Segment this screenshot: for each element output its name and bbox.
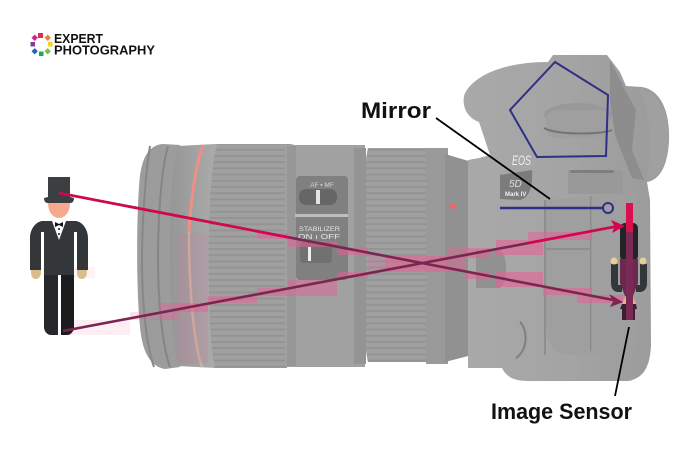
image sensor pointer line	[615, 327, 629, 396]
inverted hands	[610, 258, 618, 264]
lens barrel section	[170, 144, 300, 368]
shirt and bow tie	[52, 221, 66, 240]
right rib section	[362, 148, 434, 362]
camera body	[464, 55, 669, 381]
legs	[44, 275, 58, 335]
red ring	[189, 145, 203, 232]
inverted legs	[620, 223, 638, 261]
label: Image Sensor: Image Sensor	[491, 399, 632, 424]
AF MF switch panel: STABILIZER	[299, 226, 340, 233]
torso and arms	[30, 221, 88, 275]
person: gentleman in top hat	[30, 177, 88, 335]
front body panels	[568, 170, 623, 194]
logo: Expert Photography	[30, 32, 156, 58]
logo: Expert Photography: PHOTOGRAPHY	[54, 44, 156, 58]
camera body: Mark IV	[505, 192, 526, 198]
Mark IV badge	[500, 170, 532, 200]
pink light smear bands	[43, 232, 623, 363]
pentaprism outline	[510, 62, 608, 157]
inverted arms	[611, 264, 622, 292]
light ray: top of subject to bottom of sensor	[59, 193, 622, 306]
top dial	[544, 103, 612, 127]
mirror line and pivot	[500, 203, 613, 213]
lens rear mount	[445, 154, 472, 362]
camera lens	[137, 144, 472, 369]
light ray: bottom of subject to top of sensor	[63, 221, 624, 331]
lens red dot	[450, 203, 456, 209]
AF MF switch panel: AF ▪ MF	[310, 182, 334, 189]
inverted torso	[620, 259, 638, 296]
logo ring icon	[30, 33, 52, 56]
face	[48, 203, 70, 218]
red-to-purple sensor strip	[626, 203, 633, 320]
logo wordmark: EXPERT	[54, 32, 103, 46]
AF MF switch panel: ON ı OFF	[298, 234, 340, 241]
hands	[31, 270, 41, 279]
top hat	[44, 177, 74, 203]
mirror pointer line	[436, 118, 550, 199]
grip rib section left	[208, 144, 287, 368]
sensor strip top	[626, 203, 633, 232]
camera body: 5D	[509, 179, 522, 190]
label: Mirror: Mirror	[361, 98, 431, 123]
AF MF switch panel	[295, 176, 348, 280]
EOS badge: EOS	[512, 152, 531, 168]
middle barrel	[285, 145, 365, 367]
eyepiece	[638, 88, 669, 181]
inverted face	[622, 296, 636, 307]
inverted image on sensor	[610, 223, 647, 320]
lens front ring	[137, 144, 180, 369]
inverted hat	[620, 304, 637, 320]
